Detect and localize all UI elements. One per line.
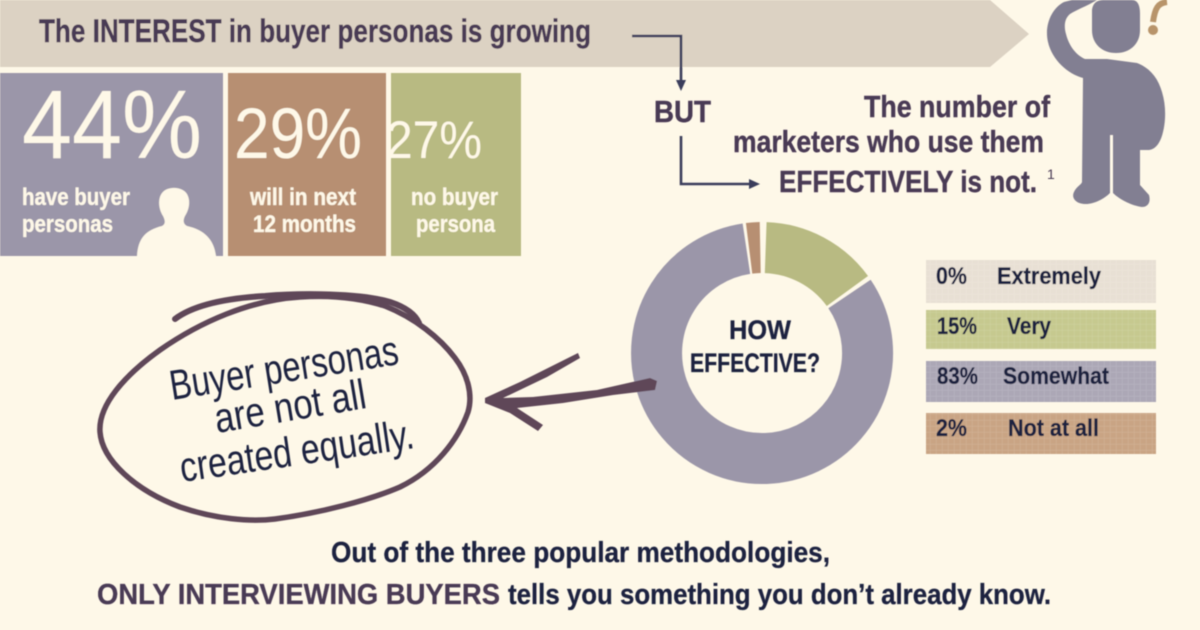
stat: 29%: 29% [234, 95, 362, 174]
legend row: not at all: 2% [936, 415, 967, 442]
legend row: somewhat: 83% [937, 363, 978, 390]
legend row: extremely: Extremely [997, 263, 1102, 290]
legend row: somewhat: Somewhat [1003, 363, 1109, 390]
top banner arrow [0, 0, 1029, 67]
segment: 2% not at all [749, 222, 760, 274]
stat: 27%: 27% [386, 111, 482, 170]
bottom statement: Out of the three popular methodologies, [331, 537, 830, 569]
banner heading: The INTEREST in buyer personas is growing [39, 13, 591, 49]
donut chart: how effective [657, 248, 868, 459]
segment: 83% somewhat [657, 249, 868, 459]
label: have buyer personas: personas [22, 211, 113, 238]
icon: question mark [1148, 2, 1167, 35]
text: number of marketers: marketers who use them [733, 124, 1044, 159]
legend row: extremely: 0% [936, 263, 967, 290]
bottom statement: ONLY INTERVIEWING BUYERS [97, 579, 500, 611]
icon: thinking person [1047, 0, 1165, 207]
arrow: sketched arrow to callout [485, 353, 657, 431]
label: will in next 12 months: will in next [249, 184, 356, 211]
legend row: very [926, 310, 1156, 349]
panel: 29% will in next 12 months [228, 73, 386, 256]
legend row: not at all: Not at all [1008, 415, 1099, 442]
legend row: somewhat [926, 361, 1156, 402]
callout text: created equally. [177, 410, 417, 491]
arrow: BUT to effectively [681, 136, 760, 189]
label: will in next 12 months: 12 months [253, 211, 356, 238]
donut label: EFFECTIVE? [690, 348, 820, 378]
callout text [166, 326, 417, 491]
icon: person silhouette [137, 188, 216, 256]
arrow: banner to BUT [632, 36, 686, 91]
label: no buyer persona: no buyer [411, 184, 498, 211]
legend row: very: Very [1007, 313, 1052, 340]
label: no buyer persona: persona [416, 211, 496, 238]
donut label: HOW [729, 315, 791, 345]
panel: 27% no buyer persona [386, 73, 521, 256]
segment: 15% very [766, 248, 847, 291]
legend row: not at all [926, 413, 1156, 454]
sketched top swoosh [175, 294, 419, 323]
legend row: extremely [926, 260, 1156, 303]
legend row: very: 15% [937, 313, 977, 340]
callout text: Buyer personas [166, 326, 402, 409]
label: have buyer personas: have buyer [22, 184, 130, 211]
bottom statement [97, 537, 1051, 611]
text: BUT: BUT [654, 94, 711, 129]
panel: 44% have buyer personas [0, 70, 223, 256]
text: number of marketers: The number of [864, 89, 1051, 124]
hand-drawn circle callout [100, 294, 470, 520]
stat: 44%: 44% [22, 70, 202, 179]
callout text: are not all [211, 370, 369, 442]
sketched ellipse [100, 296, 470, 520]
footnote marker: 1 [1047, 166, 1055, 182]
text: number of marketers: EFFECTIVELY is not. [779, 164, 1037, 199]
bottom statement: tells you something you don’t already know. [508, 579, 1051, 611]
